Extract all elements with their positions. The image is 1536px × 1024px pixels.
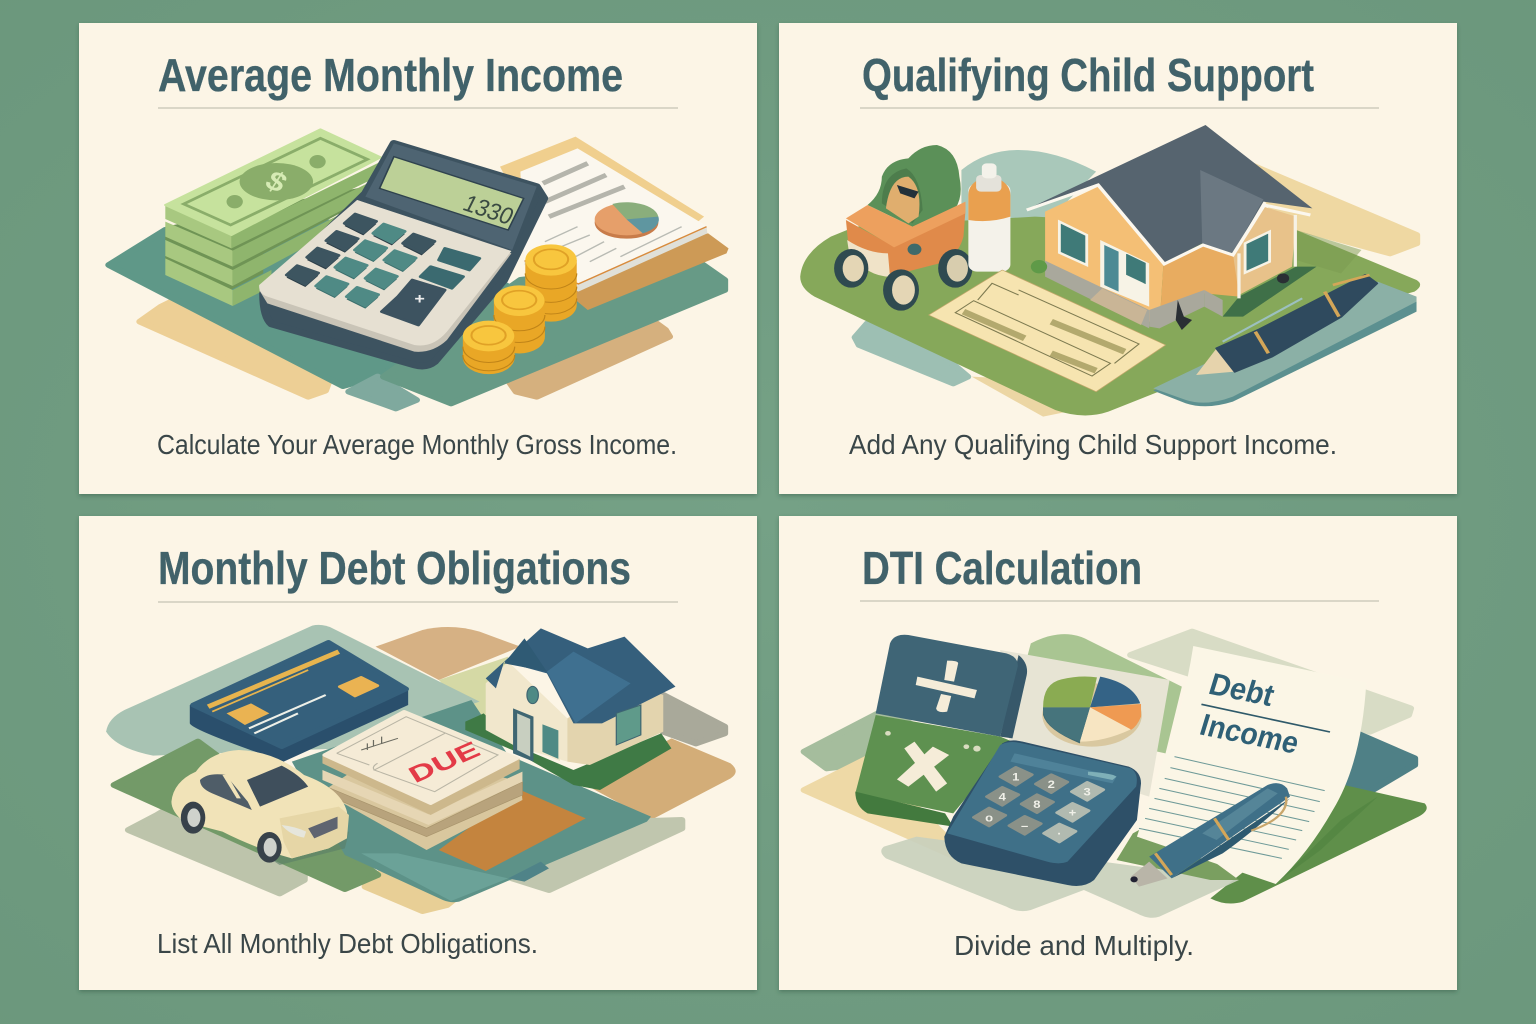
icon: banknote stack <box>165 129 381 306</box>
illustration: money, calculator, coins and report <box>109 129 729 408</box>
illustration: credit card, car, bills and house <box>106 625 736 911</box>
icon: bottle <box>968 163 1010 272</box>
panel: average monthly income <box>79 23 757 494</box>
heading: average monthly income: Average Monthly Income <box>158 49 623 101</box>
icon: calculator: – <box>1021 820 1029 832</box>
icon: pie chart sheet <box>1000 650 1170 797</box>
caption: monthly debt obligations: List All Monthly Debt Obligations. <box>157 928 538 959</box>
caption: qualifying child support: Add Any Qualifying Child Support Income. <box>849 429 1337 460</box>
icon: pen <box>1196 275 1377 375</box>
panel: qualifying child support <box>779 23 1457 494</box>
icon: calculator <box>259 143 544 366</box>
icon: calculator: 8 <box>1033 798 1041 811</box>
panel: monthly debt obligations <box>79 516 757 990</box>
icon: house <box>1027 125 1317 330</box>
icon: due bills <box>322 712 522 850</box>
icon: pen <box>1130 783 1290 887</box>
icon: calculator: + <box>1069 807 1076 819</box>
icon: calculator: 2 <box>1048 778 1055 791</box>
icon: calculator: + <box>414 291 425 307</box>
caption: DTI calculation: Divide and Multiply. <box>954 930 1194 961</box>
icon: fraction document: Income <box>1196 708 1303 761</box>
illustration: operators, chart, calculator, fraction document and pen <box>804 632 1427 918</box>
icon: coin stacks <box>463 244 577 374</box>
icon: fraction document <box>1137 646 1366 884</box>
icon: calculator: 1330 <box>459 189 518 230</box>
icon: calculator: · <box>1057 827 1062 840</box>
icon: calculator: 1 <box>1012 771 1020 783</box>
icon: calculator: o <box>985 811 993 824</box>
heading: monthly debt obligations: Monthly Debt Obligations <box>158 542 631 594</box>
icon: plus minus block <box>855 635 1027 827</box>
icon: due bills: DUE <box>404 737 485 788</box>
icon: calculator: 3 <box>1084 786 1091 798</box>
icon: credit card <box>190 642 408 762</box>
icon: stroller <box>834 145 972 311</box>
icon: fraction document: Debt <box>1205 668 1278 713</box>
heading: qualifying child support: Qualifying Child Support <box>862 49 1314 101</box>
icon: calculator: 4 <box>999 791 1006 803</box>
caption: average monthly income: Calculate Your Average Monthly Gross Income. <box>157 429 677 460</box>
icon: check <box>929 270 1166 392</box>
icon: calculator <box>944 740 1141 886</box>
icon: house <box>465 628 676 790</box>
icon: report <box>500 137 729 310</box>
panel: DTI calculation <box>779 516 1457 990</box>
heading: DTI calculation: DTI Calculation <box>862 542 1142 594</box>
icon: car <box>171 750 349 865</box>
icon: banknote stack: $ <box>260 166 293 199</box>
illustration: stroller, house, check and pen <box>800 125 1420 417</box>
